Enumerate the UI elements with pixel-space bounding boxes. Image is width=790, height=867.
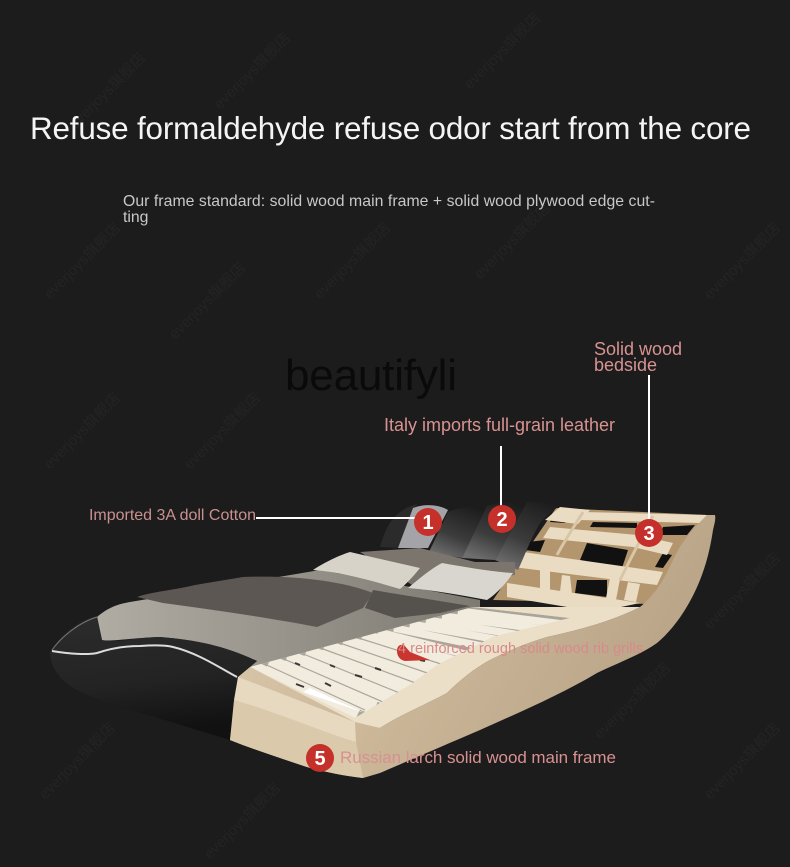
headboard leather <box>380 502 565 570</box>
pillow left <box>313 552 420 589</box>
title: Refuse formaldehyde refuse odor start from the core <box>30 111 751 146</box>
background watermarks: everjoys旗舰店 <box>591 659 674 743</box>
background watermarks: everjoys旗舰店 <box>701 719 784 803</box>
background watermarks: everjoys旗舰店 <box>311 219 394 303</box>
bed illustration <box>50 502 715 778</box>
callout 1 line <box>256 517 416 519</box>
lower front band <box>230 700 363 778</box>
frame standard text <box>123 193 655 226</box>
badge 1: 1 <box>422 512 434 534</box>
pillow right <box>408 563 513 600</box>
background watermarks: everjoys旗舰店 <box>36 719 119 803</box>
label: rib grills: 4 reinforced rough solid wood rib grills <box>398 641 643 657</box>
badge 5 <box>306 744 334 772</box>
callout 3 line <box>648 375 650 521</box>
background watermarks: everjoys旗舰店 <box>471 199 554 283</box>
label: solid wood bedside: Solid wood <box>594 339 682 359</box>
badge 3: 3 <box>643 523 655 545</box>
badge 2 <box>488 505 516 533</box>
badge 2: 2 <box>496 509 508 531</box>
badge 1 <box>414 508 442 536</box>
background watermarks: everjoys旗舰店 <box>211 29 294 113</box>
leather rim highlight <box>52 617 97 650</box>
background watermarks: everjoys旗舰店 <box>701 549 784 633</box>
label: 3A doll cotton: Imported 3A doll Cotton <box>89 507 256 524</box>
badge 3 <box>635 519 663 547</box>
frame standard text: ting <box>123 209 148 226</box>
background watermarks: everjoys旗舰店 <box>41 389 124 473</box>
badge 5: 5 <box>314 748 326 770</box>
label: solid wood bedside: bedside <box>594 355 657 375</box>
bedding under pillows <box>365 590 470 618</box>
red smudge <box>397 645 430 661</box>
background watermarks: everjoys旗舰店 <box>181 389 264 473</box>
grey sheet behind pillows <box>360 548 515 590</box>
background watermarks: everjoys旗舰店 <box>166 259 249 343</box>
wood frame top surface <box>250 607 640 728</box>
background watermarks: everjoys旗舰店 <box>701 219 784 303</box>
headboard wood lattice <box>493 507 707 612</box>
label: main frame: Russian larch solid wood main frame <box>340 748 616 767</box>
background watermarks: everjoys旗舰店 <box>201 779 284 863</box>
background watermarks: everjoys旗舰店 <box>41 219 124 303</box>
background watermarks: everjoys旗舰店 <box>461 9 544 93</box>
blanket <box>137 577 373 627</box>
black leather side rail <box>50 616 257 740</box>
label: Italy imports: Italy imports full-grain leather <box>384 415 615 435</box>
main wood frame <box>230 515 715 778</box>
background watermarks: everjoys旗舰店 <box>66 49 149 133</box>
rib grills slats <box>250 607 570 718</box>
label: solid wood bedside <box>594 339 682 375</box>
callout 2 line <box>500 446 502 506</box>
frame standard text: Our frame standard: solid wood main frame + solid wood plywood edge cut- <box>123 193 655 210</box>
white piping <box>52 645 237 677</box>
brand name: beautifyli <box>285 351 457 400</box>
mattress <box>97 570 480 667</box>
front corner light panel <box>234 677 356 742</box>
